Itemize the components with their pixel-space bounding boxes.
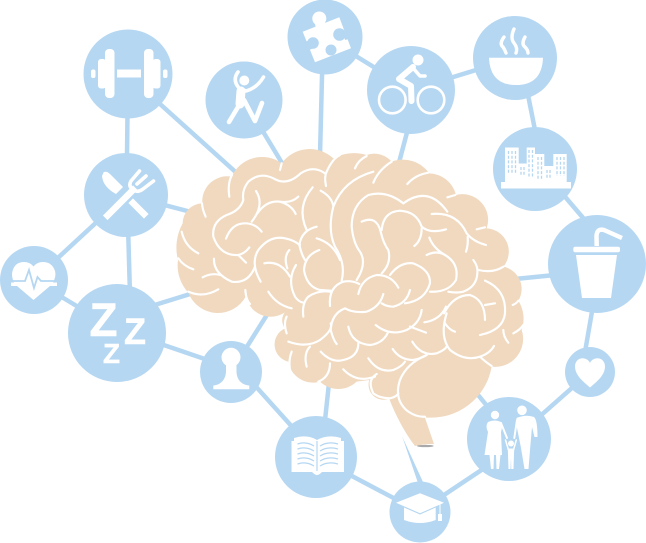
brain folds — [178, 155, 523, 417]
brain stem — [388, 397, 434, 446]
icon: jumping person — [229, 72, 264, 122]
icon: open book — [292, 436, 344, 475]
node: open book — [275, 416, 357, 498]
node: dumbbell — [84, 30, 172, 118]
brain silhouette — [176, 149, 524, 418]
icon: family — [484, 406, 538, 469]
icon: sleep Z letters: Z — [103, 338, 120, 369]
icon: sleep Z letters — [90, 294, 146, 369]
icon: stamp — [213, 348, 249, 389]
icon: cyclist — [379, 54, 444, 113]
icon: sleep Z letters: Z — [90, 294, 118, 347]
node: cyclist — [367, 46, 455, 134]
icon: knife and fork — [102, 171, 154, 216]
icon: dumbbell — [91, 49, 168, 98]
node: jumping person — [206, 62, 282, 138]
icon: heart — [575, 358, 605, 388]
icon: sleep Z letters: Z — [124, 311, 146, 352]
node: steaming bowl — [473, 16, 557, 100]
node: heart — [565, 347, 615, 397]
icon: puzzle piece — [303, 12, 353, 62]
node: puzzle piece — [288, 0, 362, 74]
node: city — [493, 127, 577, 211]
icon: graduation cap — [396, 493, 444, 523]
node: sleep — [68, 284, 166, 382]
stem cut end — [417, 445, 434, 447]
node: drink cup — [548, 215, 646, 313]
icon: drink cup — [573, 230, 622, 298]
brain — [176, 149, 524, 447]
node: cutlery — [84, 153, 168, 237]
icon: steaming bowl — [489, 29, 543, 85]
node: stamp — [200, 341, 262, 403]
node: heart monitor — [0, 246, 68, 314]
icon: heart with pulse — [11, 262, 57, 300]
node: family — [467, 397, 551, 481]
network connectors — [34, 37, 594, 512]
node: graduation cap — [390, 482, 450, 542]
icon: city skyline — [501, 148, 571, 188]
